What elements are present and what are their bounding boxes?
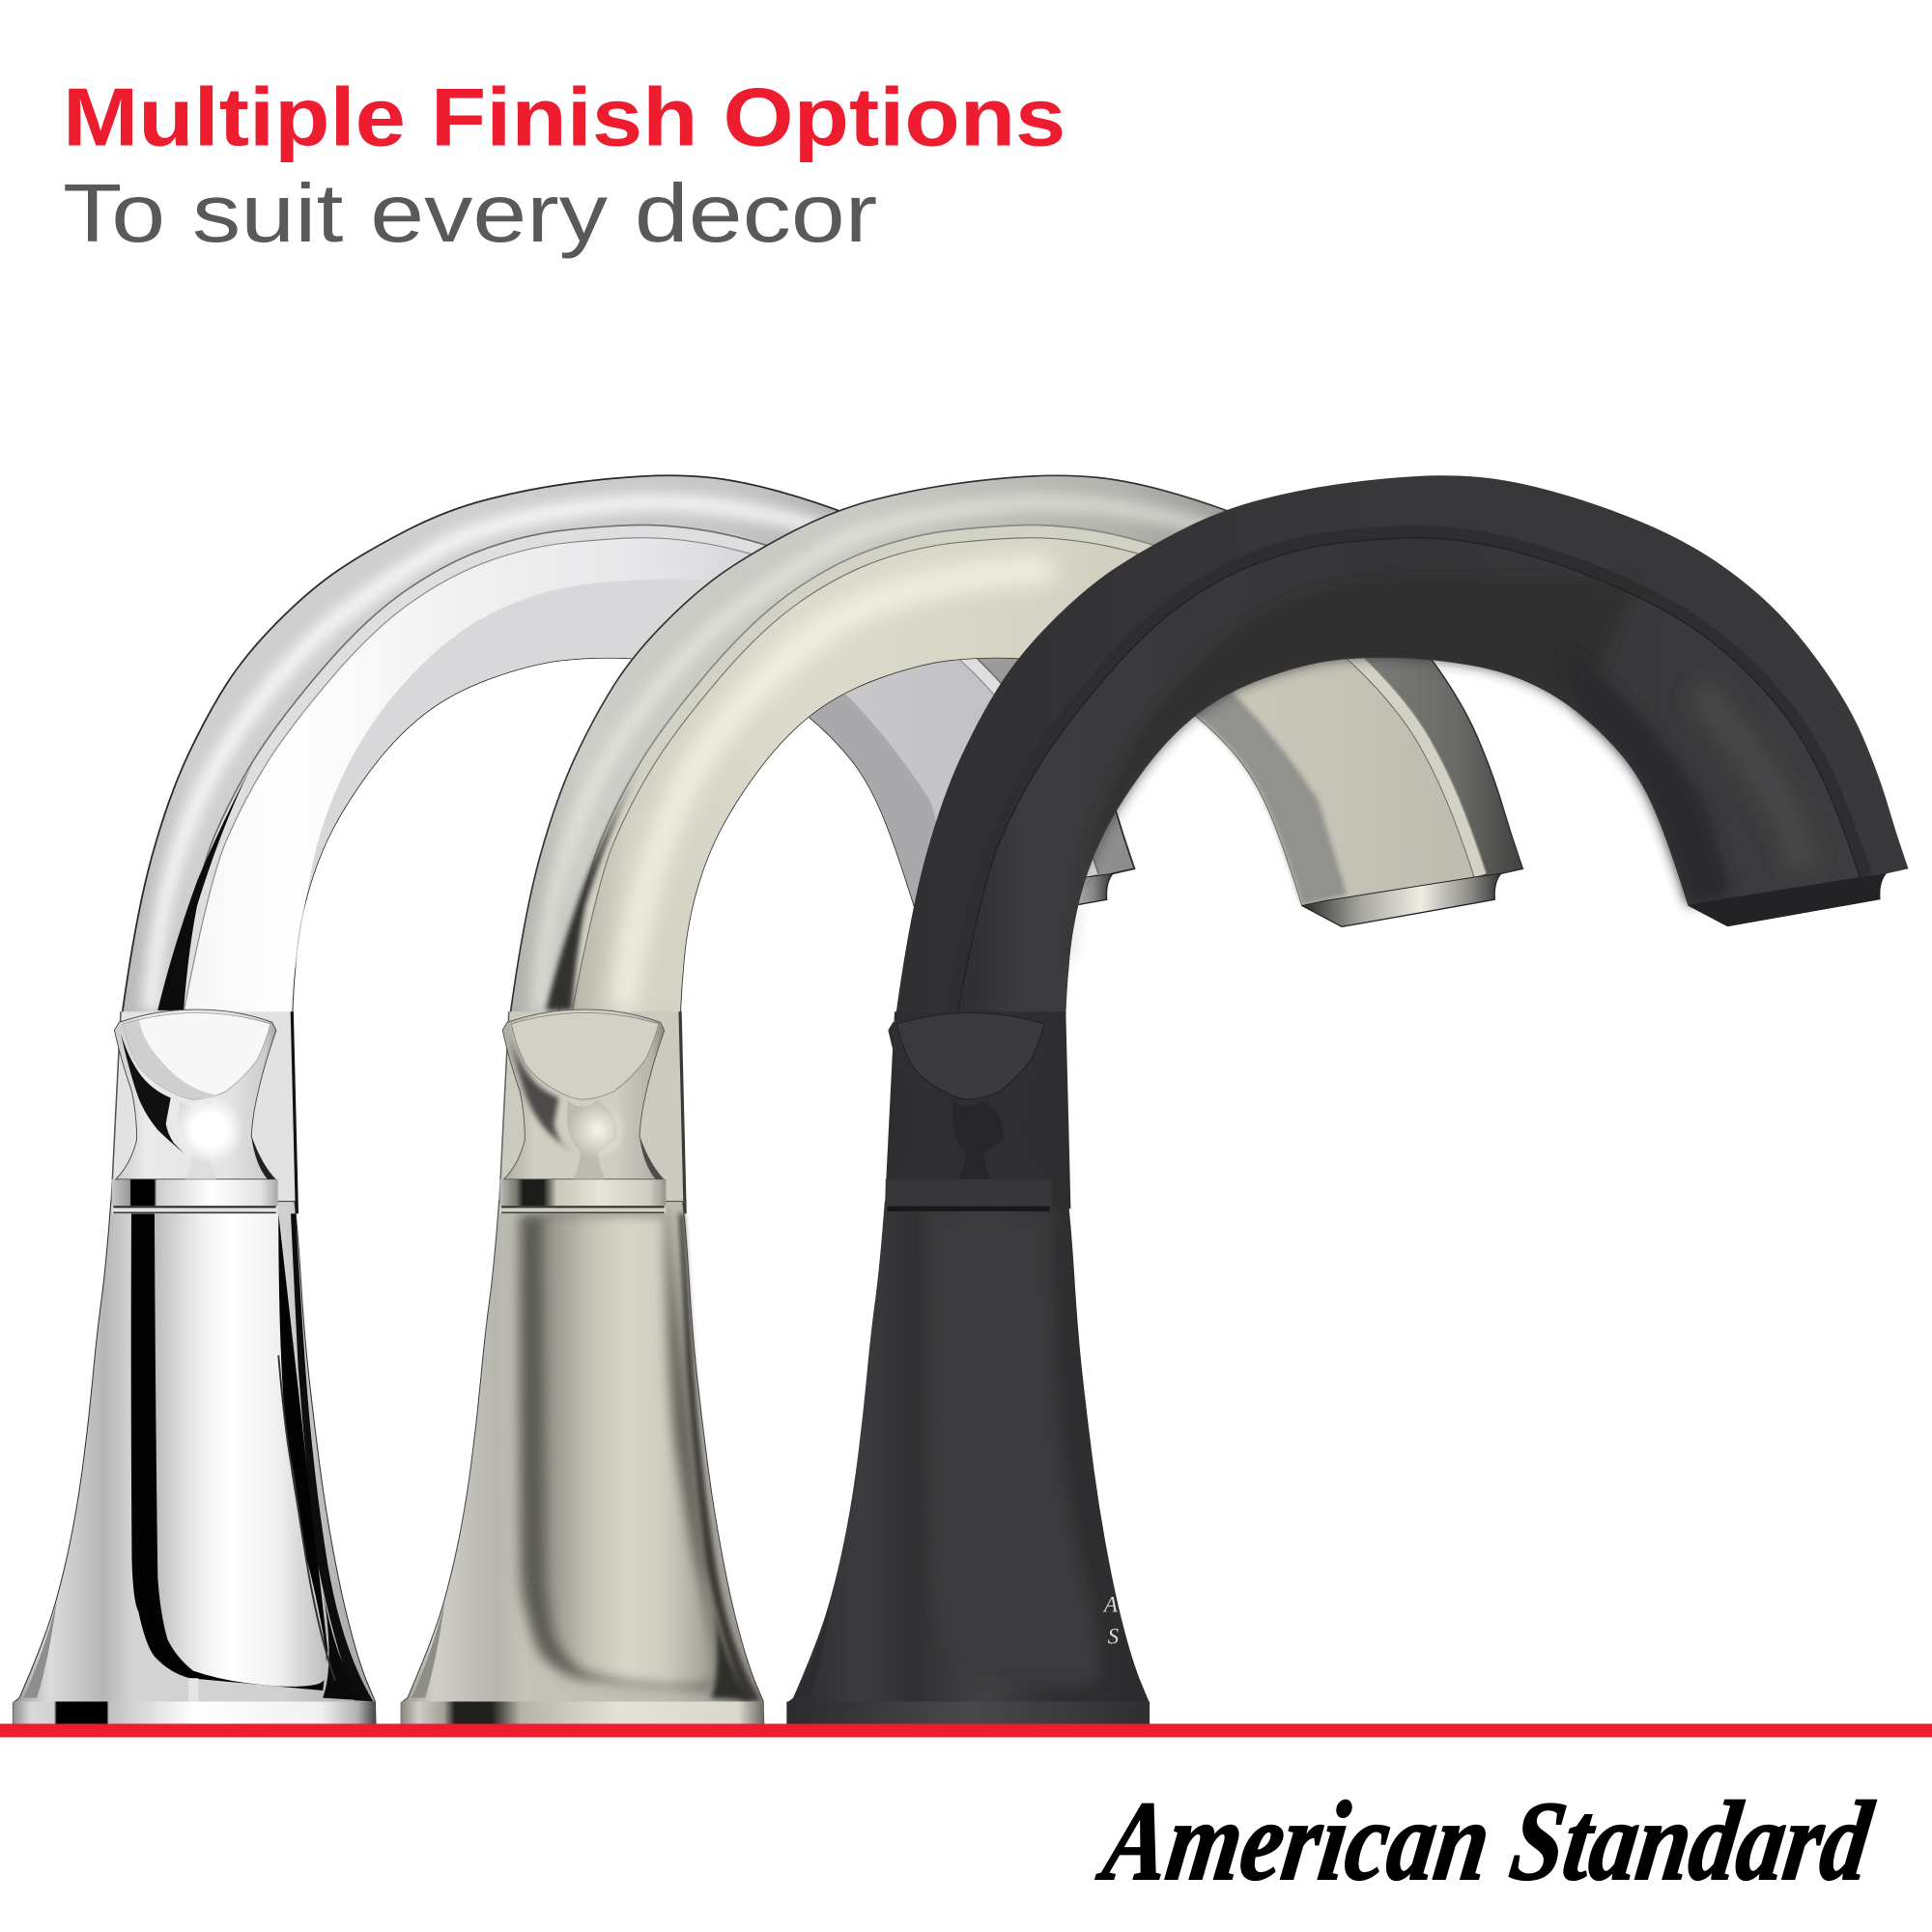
nickel base ring [401,1701,764,1725]
faucet: brushed nickel finish [401,475,1522,1725]
black spout arch [895,475,1909,1015]
subtitle: To suit every decor: To suit every decor [63,168,877,260]
chrome collar [112,1179,278,1213]
chrome body column [13,1011,376,1725]
title: Multiple Finish Options: Multiple Finish Options [63,72,1065,164]
nickel spout arch [510,475,1522,1015]
nickel body column [401,1011,764,1725]
black handle [888,1009,1050,1179]
engraved mark on black body: S [1108,1625,1120,1649]
nickel handle [502,1009,665,1179]
faucet: matte black finish [786,475,1909,1725]
black collar [886,1179,1052,1211]
chrome spout arch [122,475,1134,1015]
chrome base ring [13,1701,376,1725]
black body column [786,1011,1150,1725]
red divider line [0,1723,1932,1737]
nickel collar [499,1179,666,1213]
faucet: polished chrome finish [13,475,1134,1725]
chrome handle [114,1009,276,1179]
black base ring [786,1701,1150,1725]
engraved mark on black body [1102,1592,1120,1649]
engraved mark on black body: A [1102,1592,1119,1616]
